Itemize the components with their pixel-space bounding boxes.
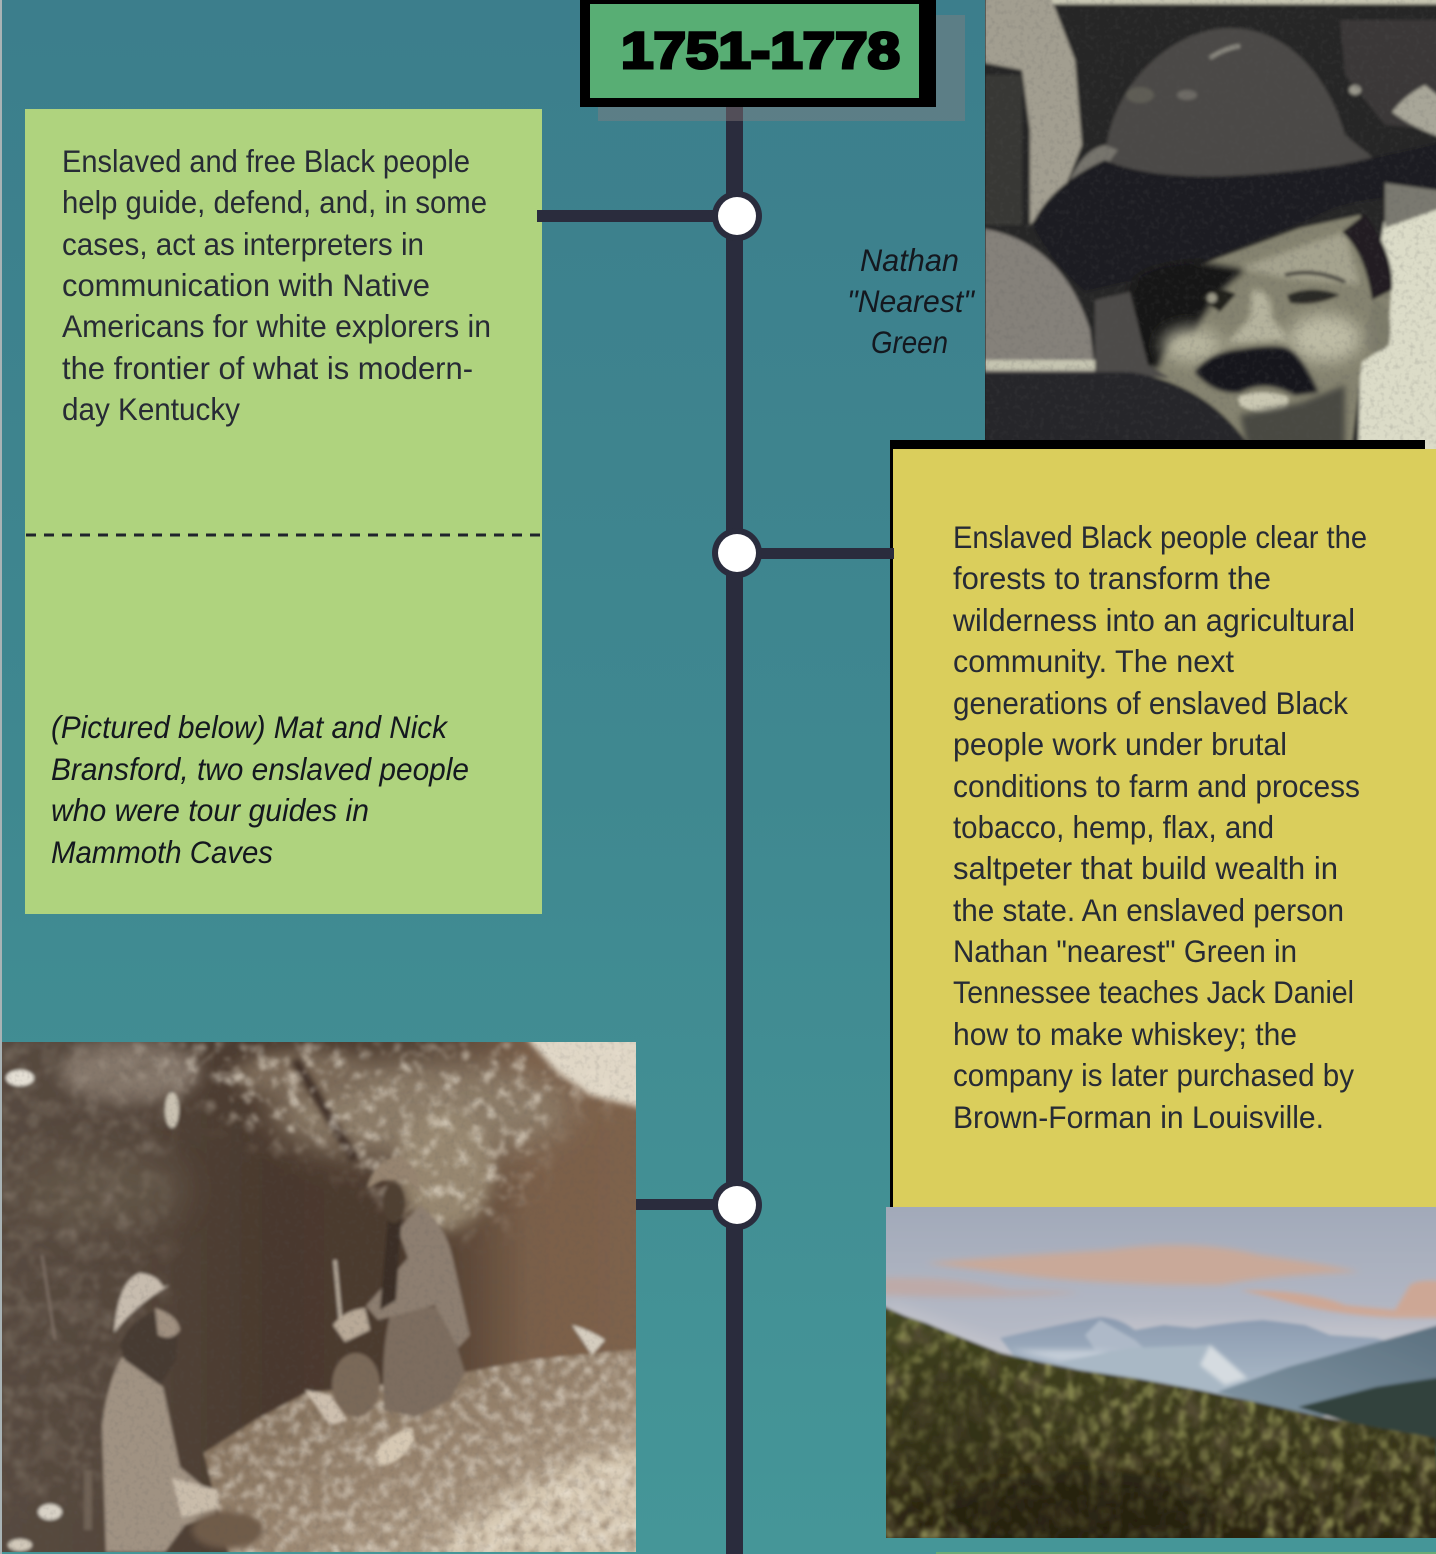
- left page edge: [0, 0, 2, 1554]
- paragraph: guides and interpreters: help guide, defend, and, in some: [62, 184, 487, 220]
- photo caption: Nathan Nearest Green: "Nearest": [847, 283, 976, 319]
- photo caption: Mat and Nick Bransford: [51, 709, 469, 870]
- timeline spine: [726, 100, 743, 1554]
- dashed divider: [26, 534, 540, 536]
- paragraph: enslaved labor: people work under brutal: [953, 726, 1287, 762]
- paragraph: guides and interpreters: day Kentucky: [62, 391, 240, 427]
- paragraph: enslaved labor: how to make whiskey; the: [953, 1016, 1297, 1052]
- paragraph: enslaved labor: Nathan "nearest" Green in: [953, 933, 1297, 969]
- photo: Mat and Nick Bransford at Mammoth Cave: [0, 1030, 650, 1554]
- photo caption: Nathan Nearest Green: Green: [871, 324, 948, 360]
- paragraph: guides and interpreters: Americans for white explorers in: [62, 308, 491, 344]
- photo caption: Mat and Nick Bransford: Bransford, two enslaved people: [51, 751, 469, 787]
- paragraph: enslaved labor: forests to transform the: [953, 560, 1271, 596]
- timeline node 3: [712, 1180, 762, 1230]
- clouds: [875, 1245, 1436, 1318]
- connector: forest text panel: [758, 548, 894, 559]
- paragraph: enslaved labor: wilderness into an agricultural: [952, 602, 1355, 638]
- paragraph: enslaved labor: [952, 519, 1367, 1135]
- title badge drop shadow: [598, 15, 965, 121]
- paragraph: guides and interpreters: communication with Native: [62, 267, 430, 303]
- paragraph: enslaved labor: company is later purchased by: [953, 1057, 1354, 1093]
- paragraph: guides and interpreters: Enslaved and free Black people: [62, 143, 470, 179]
- photo caption: Mat and Nick Bransford: who were tour guides in: [51, 792, 369, 828]
- timeline node 2: [712, 528, 762, 578]
- connector: guide text panel: [537, 210, 717, 222]
- title badge: [580, 0, 936, 107]
- timeline node 1: [712, 191, 762, 241]
- photo: forested mountain landscape: [875, 1195, 1436, 1554]
- photo caption: Mat and Nick Bransford: Mammoth Caves: [51, 834, 273, 870]
- photo caption: Nathan Nearest Green: Nathan: [860, 242, 959, 278]
- bottom edge sliver: [936, 1552, 1436, 1554]
- panel: agriculture text (yellow): [890, 440, 1436, 1207]
- paragraph: guides and interpreters: [62, 143, 491, 427]
- paragraph: enslaved labor: Enslaved Black people clear the: [953, 519, 1367, 555]
- connector: Mammoth Cave photo: [636, 1199, 716, 1210]
- photo: Nathan Nearest Green portrait: [970, 0, 1436, 465]
- paragraph: enslaved labor: community. The next: [953, 643, 1234, 679]
- paragraph: enslaved labor: Tennessee teaches Jack Daniel: [953, 974, 1354, 1010]
- forest hillside: [886, 1305, 1436, 1538]
- paragraph: enslaved labor: generations of enslaved Black: [953, 685, 1348, 721]
- title text: 1751-1778: [621, 22, 900, 79]
- paragraph: enslaved labor: saltpeter that build wealth in: [953, 850, 1338, 886]
- panel: explorers text (green): [25, 109, 542, 914]
- paragraph: guides and interpreters: cases, act as interpreters in: [62, 226, 424, 262]
- paragraph: enslaved labor: Brown-Forman in Louisville.: [953, 1099, 1324, 1135]
- paragraph: guides and interpreters: the frontier of what is modern-: [62, 350, 473, 386]
- photo caption: Mat and Nick Bransford: (Pictured below) Mat and Nick: [51, 709, 449, 745]
- paragraph: enslaved labor: the state. An enslaved person: [953, 892, 1344, 928]
- distant mountains: [1000, 1316, 1383, 1398]
- photo caption: Nathan Nearest Green: [847, 242, 976, 360]
- paragraph: enslaved labor: tobacco, hemp, flax, and: [953, 809, 1274, 845]
- paragraph: enslaved labor: conditions to farm and process: [953, 768, 1360, 804]
